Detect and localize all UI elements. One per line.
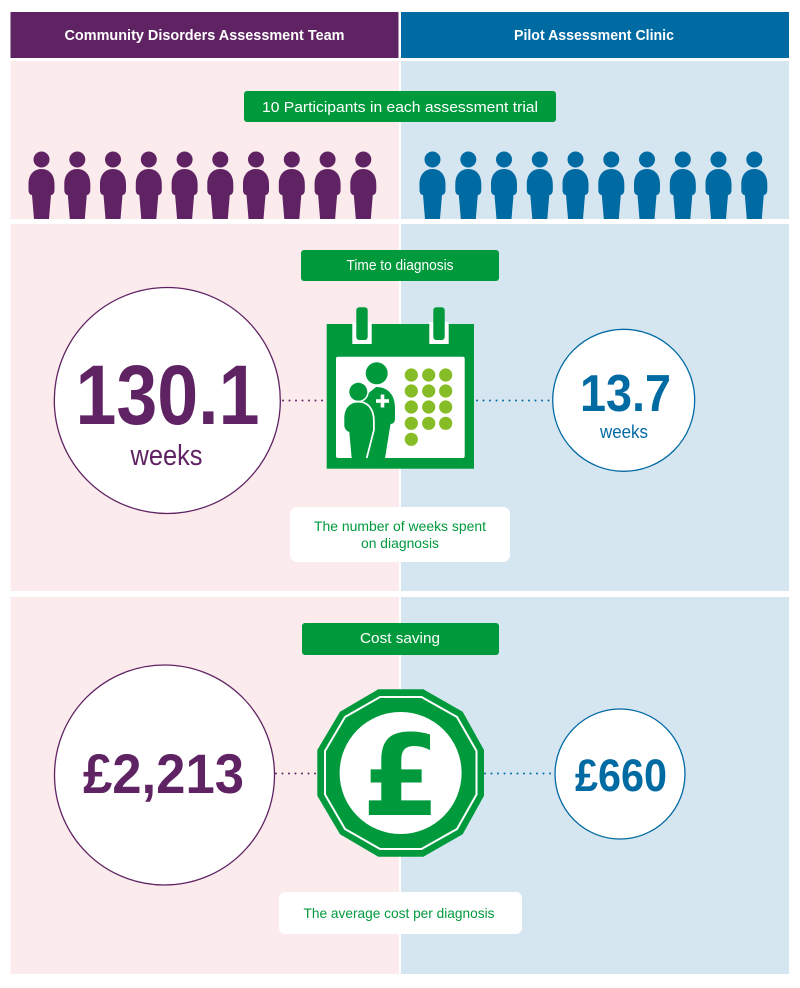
label: cost saving: [302, 623, 499, 655]
header: Community Disorders Assessment Team: Community Disorders Assessment Team: [64, 28, 344, 44]
dotted connector left: [283, 400, 327, 402]
note: number of weeks: on diagnosis: [361, 535, 439, 551]
header: Pilot Assessment Clinic: Pilot Assessment Clinic: [514, 28, 674, 44]
circle: £660: [555, 709, 685, 839]
header: Pilot Assessment Clinic: [401, 12, 789, 58]
circle: 130.1 weeks: 130.1: [76, 348, 260, 442]
note: number of weeks: [290, 507, 510, 562]
note: number of weeks: The number of weeks spent: [314, 518, 486, 534]
icons: ten blue people: [420, 152, 767, 219]
header: Community Disorders Assessment Team: [10, 12, 398, 58]
label: participants: [244, 91, 556, 122]
panel: cost saving: [10, 597, 789, 974]
circle: £2,213: [54, 665, 274, 885]
circle: 13.7 weeks: weeks: [599, 422, 648, 442]
panel: participants: [10, 61, 789, 219]
label: time to diagnosis: Time to diagnosis: [346, 258, 454, 274]
circle: 13.7 weeks: 13.7: [580, 365, 671, 423]
note: average cost: [279, 892, 522, 934]
dotted connector right: [477, 400, 551, 402]
circle: £2,213: £2,213: [83, 742, 244, 805]
icon: pound coin: [317, 689, 484, 857]
calendar dots: [405, 368, 452, 446]
dotted connector left: [276, 772, 317, 774]
adult figure: [360, 362, 395, 458]
label: time to diagnosis: [301, 250, 499, 281]
dotted connector right: [485, 772, 555, 774]
circle: 130.1 weeks: weeks: [130, 440, 202, 472]
icons: ten purple people: [28, 152, 376, 219]
note: average cost: The average cost per diagnosis: [304, 905, 494, 921]
circle: 13.7 weeks: [553, 329, 695, 471]
label: participants: 10 Participants in each assessment trial: [262, 99, 538, 116]
label: cost saving: Cost saving: [360, 631, 440, 647]
circle: 130.1 weeks: [54, 288, 280, 514]
icon: calendar with clinician and child: [327, 307, 474, 469]
circle: £660: £660: [575, 750, 667, 801]
icon: pound coin: £: [362, 712, 440, 842]
panel: time to diagnosis: [10, 224, 789, 591]
child figure: [340, 383, 390, 461]
